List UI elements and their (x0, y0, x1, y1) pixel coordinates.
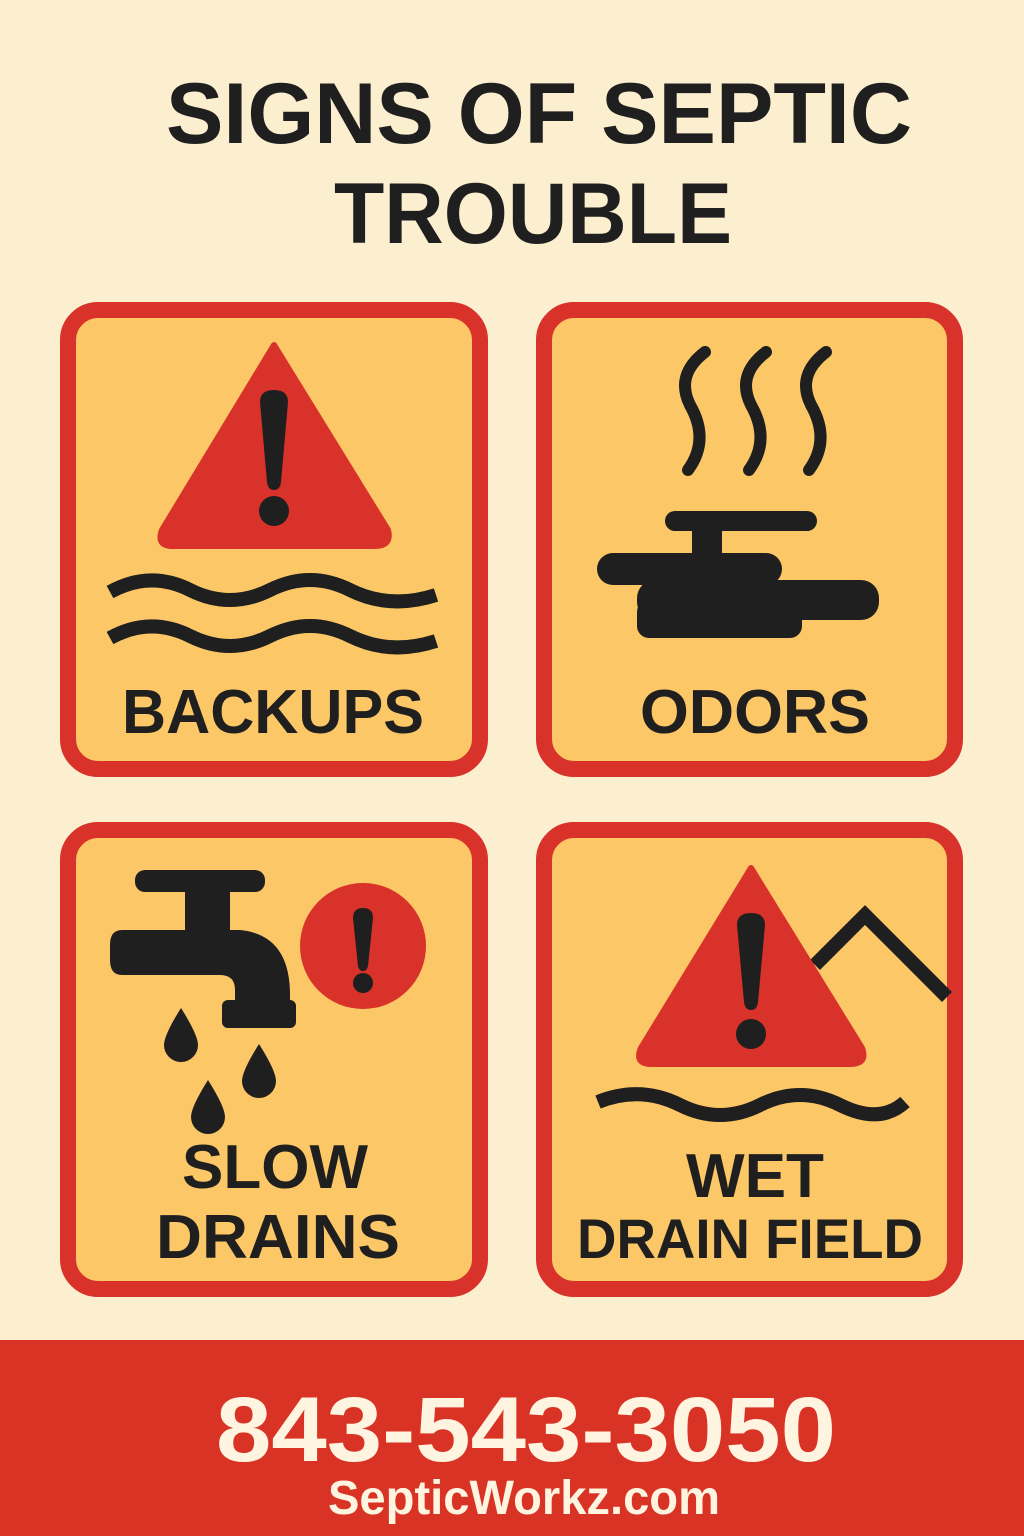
label: odors: ODORS (640, 678, 870, 747)
phone number: 843-543-3050 (216, 1379, 836, 1481)
panel: odors (544, 310, 955, 769)
panel: backups (68, 310, 480, 769)
icon: puddle (597, 511, 879, 638)
icon: odor lines (685, 352, 826, 470)
label: slow drains: DRAINS (156, 1203, 400, 1272)
icon: alert circle (300, 883, 426, 1009)
website: SepticWorkz.com (328, 1472, 720, 1525)
icon: wave (598, 1094, 905, 1115)
panel: slow drains (68, 830, 480, 1289)
label: wet drain field (577, 1142, 923, 1270)
footer band (0, 1340, 1024, 1536)
icon: waves (110, 580, 436, 647)
label: slow drains (156, 1133, 400, 1272)
title: TROUBLE (334, 166, 732, 262)
title (166, 66, 912, 262)
icon: roof line (815, 915, 947, 997)
label: slow drains: SLOW (182, 1133, 368, 1202)
icon: warning triangle (160, 345, 389, 546)
label: backups: BACKUPS (122, 678, 424, 747)
label: wet drain field: WET (686, 1142, 824, 1211)
title: SIGNS OF SEPTIC (166, 66, 912, 162)
panel: wet drain field (544, 830, 955, 1289)
label: wet drain field: DRAIN FIELD (577, 1207, 923, 1270)
icon: warning triangle (639, 868, 864, 1064)
icon: faucet (110, 870, 296, 1134)
